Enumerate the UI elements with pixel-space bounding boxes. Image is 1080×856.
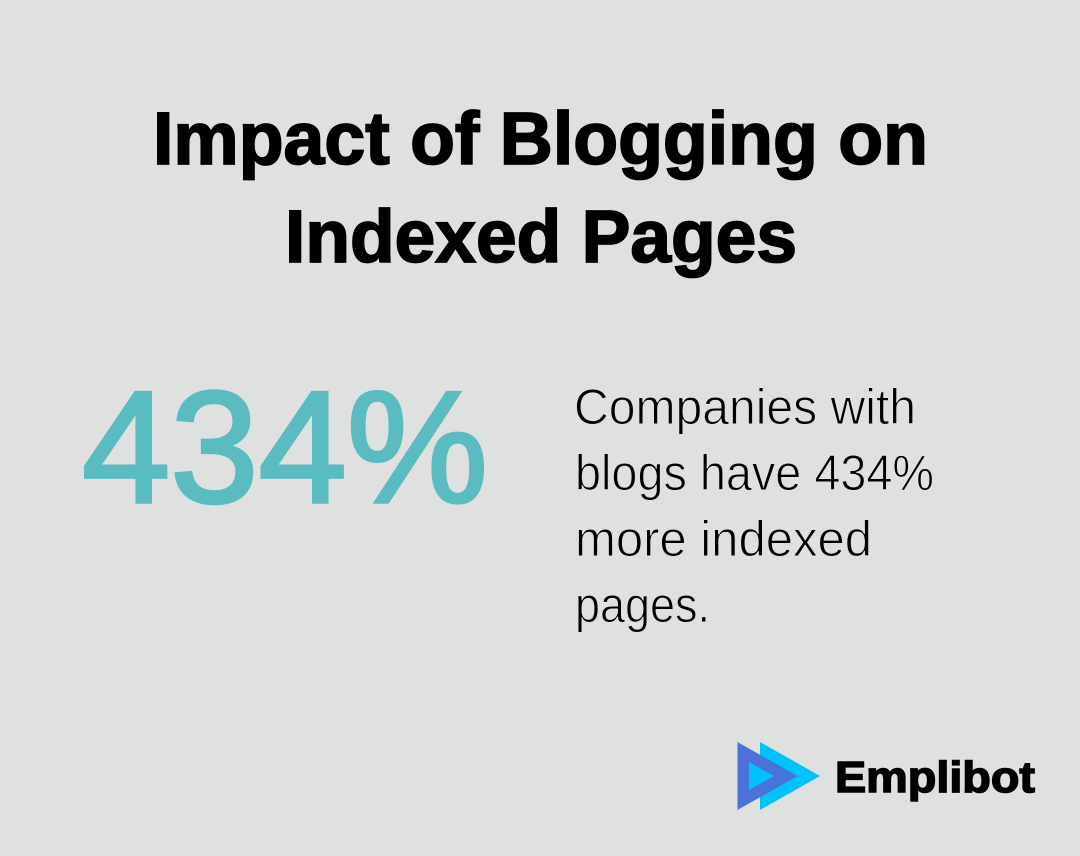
logo: Emplibot [738,742,1035,810]
description text: more indexed [575,511,872,567]
big statistic: 434%: 434% [82,358,488,536]
description text [574,379,934,633]
icon: play triangles [738,742,820,810]
description text: blogs have 434% [575,445,934,501]
title: Indexed Pages [285,195,797,278]
logo wordmark: Emplibot [835,753,1035,802]
title: Impact of Blogging on [153,97,928,180]
title [153,97,928,278]
description text: Companies with [574,379,916,435]
description text: pages. [575,577,710,633]
